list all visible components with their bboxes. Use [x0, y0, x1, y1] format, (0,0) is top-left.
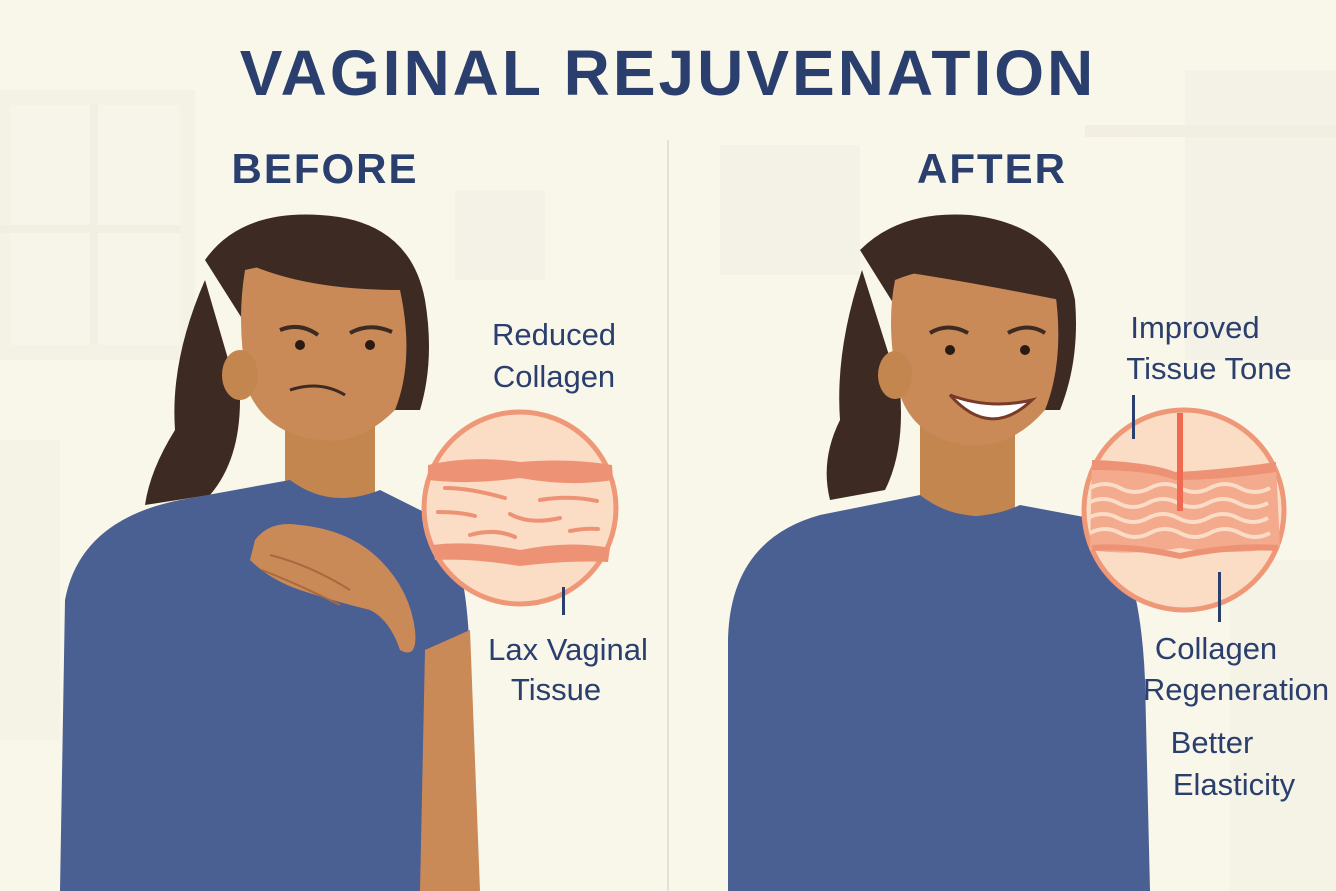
- heading: before: BEFORE: [231, 145, 419, 192]
- figure: before woman: [60, 215, 480, 891]
- text: Collagen: [493, 359, 615, 394]
- label: lax vaginal tissue: Lax Vaginal: [488, 632, 648, 667]
- label: collagen regeneration: Collagen: [1155, 631, 1277, 666]
- label: better elasticity: Better: [1171, 725, 1253, 760]
- circle: collagen regeneration: [1084, 410, 1284, 610]
- label: reduced collagen: Reduced: [492, 317, 616, 352]
- label: improved tissue tone: [1126, 310, 1292, 439]
- title: VAGINAL REJUVENATION: [240, 37, 1096, 109]
- figure: after woman: [728, 214, 1150, 891]
- label: lax vaginal tissue: Tissue: [511, 672, 601, 707]
- heading: after: AFTER: [917, 145, 1067, 192]
- label: collagen regeneration: Regeneration: [1143, 672, 1329, 707]
- text: Elasticity: [1173, 767, 1296, 802]
- label: lax vaginal tissue: [488, 587, 648, 707]
- label: improved tissue tone: Tissue Tone: [1126, 351, 1292, 386]
- circle: reduced collagen: [424, 412, 616, 604]
- label: collagen regeneration: [1143, 572, 1329, 707]
- label: improved tissue tone: Improved: [1130, 310, 1260, 345]
- divider: [667, 140, 669, 891]
